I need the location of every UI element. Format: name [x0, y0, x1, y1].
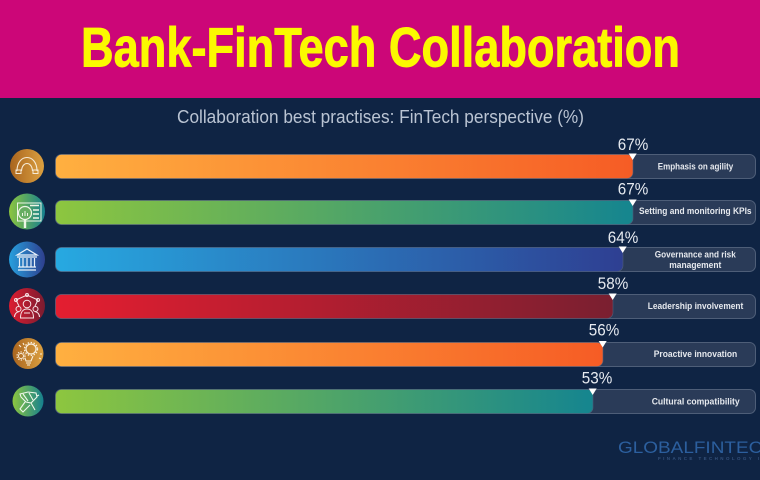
bar 67% [56, 154, 633, 178]
marker [629, 154, 637, 160]
row: Setting and monitoring KPIs [9, 180, 756, 230]
label: Leadership involvement [648, 301, 743, 311]
label: Governance and risk [655, 250, 737, 260]
label: Cultural compatibility [652, 396, 740, 406]
value: 58% [598, 274, 628, 293]
bar 56% [56, 342, 603, 366]
label: Proactive innovation [654, 349, 737, 359]
icon: gauge arch [10, 149, 44, 183]
value: 53% [582, 368, 612, 388]
marker [609, 294, 617, 300]
label track [56, 248, 756, 272]
label track [56, 294, 756, 318]
row: Cultural compatibility [12, 368, 756, 416]
label: Setting and monitoring KPIs [639, 206, 752, 216]
title banner [0, 0, 760, 98]
icon: handshake [12, 386, 44, 416]
label: Emphasis on agility [658, 162, 733, 172]
value: 56% [589, 320, 619, 340]
icon: magnifier over dashboard [9, 194, 45, 230]
label track [56, 342, 756, 366]
marker [619, 246, 627, 253]
row: Leadership involvement [9, 274, 756, 324]
value: 67% [618, 180, 648, 198]
label track [56, 200, 756, 224]
label track [56, 154, 756, 178]
logo: Global Fintech: GLOBALFINTECH [618, 438, 760, 457]
value: 67% [618, 135, 648, 154]
value: 64% [608, 228, 638, 247]
bar 67% [56, 200, 633, 224]
marker [589, 388, 597, 395]
row: Proactive innovation [12, 320, 756, 369]
icon: bank building [9, 242, 45, 278]
icon: leadership people network [9, 288, 45, 324]
icon: light bulb with gears [12, 338, 44, 369]
label track [56, 390, 756, 414]
bar 58% [56, 294, 613, 318]
bar 64% [56, 248, 623, 272]
row: Emphasis on agility [10, 135, 756, 183]
row: Governance and risk management [9, 228, 756, 278]
bar 53% [56, 390, 593, 414]
subtitle: Collaboration best practises: FinTech perspective (%) [177, 107, 584, 127]
label: management [669, 260, 721, 270]
marker [629, 200, 637, 206]
marker [599, 341, 607, 348]
